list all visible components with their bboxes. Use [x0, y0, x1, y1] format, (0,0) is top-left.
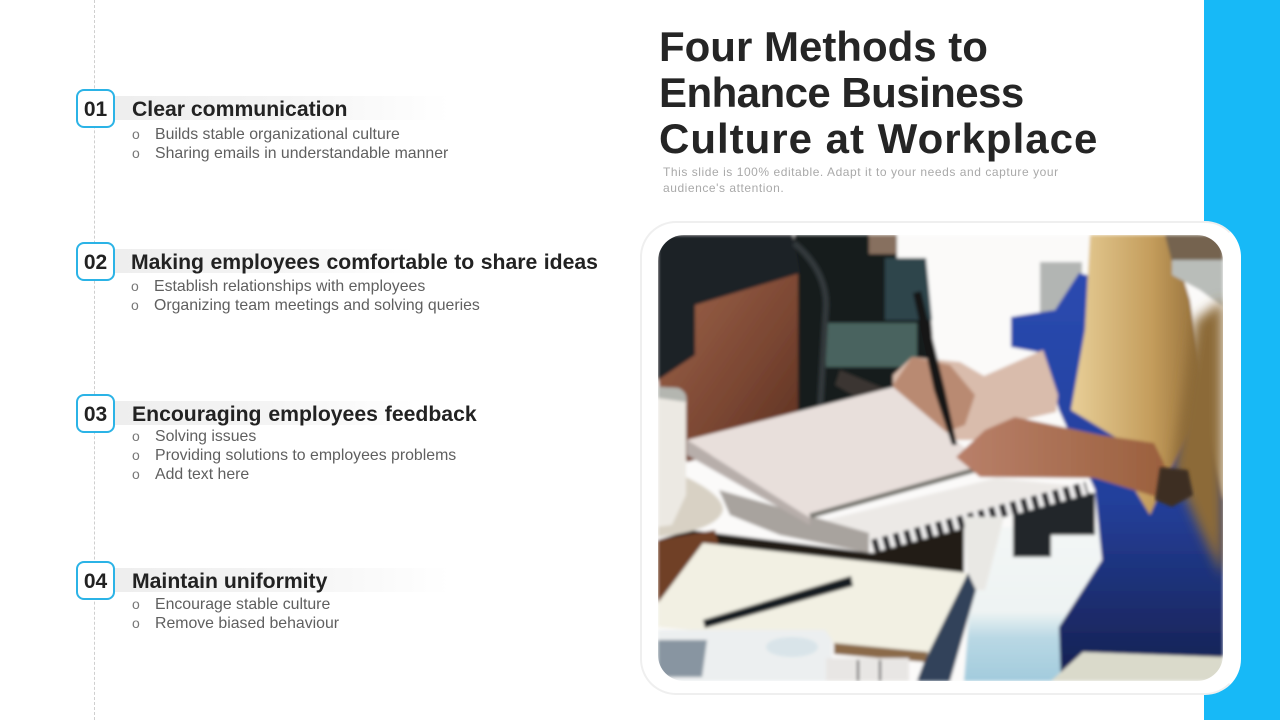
item 01: Builds stable organizational culture — [155, 126, 400, 143]
item 04: Maintain uniformity — [132, 570, 327, 593]
forearm and writing hand — [893, 350, 1058, 440]
saucer — [658, 477, 723, 537]
item 04: 04 — [84, 570, 107, 593]
title: Four Methods to — [659, 23, 988, 70]
item 03: Encouraging employees feedback — [132, 403, 477, 426]
item 03: Solving issues — [155, 428, 256, 445]
chair back — [794, 243, 826, 412]
item 03: o — [132, 466, 140, 482]
item 01: Sharing emails in understandable manner — [155, 145, 448, 162]
title: Enhance Business — [659, 69, 1024, 116]
mug — [658, 387, 686, 527]
lady's lap — [1051, 652, 1223, 681]
right blue band — [1204, 0, 1280, 720]
item 01: 01 — [84, 98, 107, 121]
item 02 — [76, 242, 598, 314]
item 03: Providing solutions to employees problems — [155, 447, 456, 464]
item 04: Encourage stable culture — [155, 596, 330, 613]
item 03: Add text here — [155, 466, 249, 483]
item 02: Establish relationships with employees — [154, 278, 425, 295]
upper notebook — [687, 387, 985, 518]
lower pen — [703, 576, 853, 628]
item 01 — [76, 89, 448, 162]
blurred foreground hair — [1173, 300, 1223, 577]
dark table legs — [1013, 493, 1095, 557]
hand on notebook — [956, 417, 1172, 498]
subtitle: audience's attention. — [663, 181, 784, 195]
photo frame — [640, 221, 1241, 695]
item 04: Remove biased behaviour — [155, 615, 339, 632]
item 03 — [76, 394, 477, 483]
item 01: o — [132, 126, 140, 142]
item 02: 02 — [84, 251, 107, 274]
hair — [1071, 235, 1205, 515]
blue blouse — [1011, 273, 1223, 681]
item 03: o — [132, 447, 140, 463]
white table edge — [964, 517, 1004, 590]
item 01: o — [132, 145, 140, 161]
laptop — [658, 630, 832, 681]
item 02: o — [131, 297, 139, 313]
bright background — [658, 235, 1223, 681]
table and dark gap — [659, 526, 966, 574]
lower notebook with black spiral — [828, 478, 1067, 549]
bright floor and table — [964, 527, 1100, 681]
man's arm — [658, 265, 798, 462]
subtitle: This slide is 100% editable. Adapt it to your needs and capture your — [663, 165, 1059, 179]
title: Culture at Workplace — [659, 115, 1098, 162]
photo: people writing in notebooks — [658, 235, 1223, 681]
title — [659, 23, 1098, 162]
item 02: Organizing team meetings and solving queries — [154, 297, 480, 314]
item 04 — [76, 561, 339, 632]
pen — [913, 291, 957, 445]
timeline dashed line — [94, 0, 95, 720]
item 02: o — [131, 278, 139, 294]
table leg — [917, 573, 976, 681]
item 01: Clear communication — [132, 98, 347, 121]
man's shirt — [658, 235, 800, 380]
item 03: o — [132, 428, 140, 444]
item 04: o — [132, 596, 140, 612]
item 03: 03 — [84, 403, 107, 426]
item 04: o — [132, 615, 140, 631]
window chair — [1040, 262, 1082, 315]
dark background behind table — [794, 235, 936, 420]
lower paper notebook — [658, 543, 968, 660]
item 02: Making employees comfortable to share ideas — [131, 251, 598, 274]
watch — [1155, 467, 1193, 507]
subtitle — [663, 165, 1059, 195]
